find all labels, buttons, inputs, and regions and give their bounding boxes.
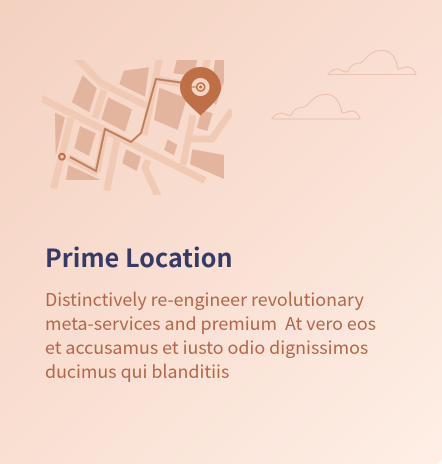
cloud upper (328, 50, 416, 74)
map blocks (55, 60, 224, 180)
icon: location pin (180, 67, 221, 116)
cloud lower (272, 94, 360, 119)
body text: Distinctively re-engineer revolutionary meta-services and premium At vero eos et accusamus et iusto odio dignissimos ducimus qui blanditiis (45, 286, 376, 384)
route line (70, 79, 184, 171)
heading: Prime Location (45, 239, 233, 275)
map roads (34, 56, 232, 196)
route start marker (59, 154, 65, 160)
illustration (42, 50, 417, 195)
map (34, 56, 232, 196)
